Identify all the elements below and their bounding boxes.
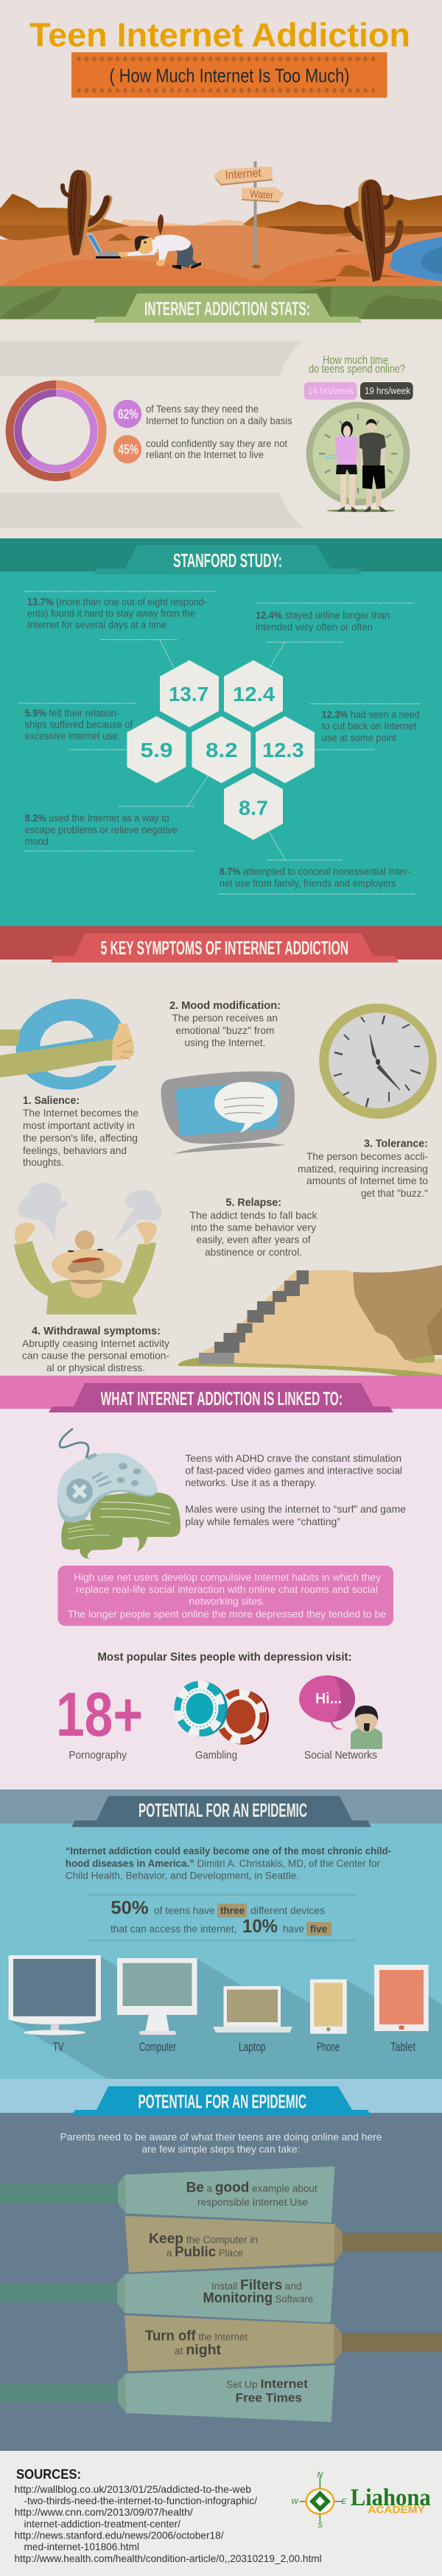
stat: devices: 50% bbox=[110, 1898, 149, 1918]
fists bbox=[15, 1222, 35, 1245]
intro: parents: Parents need to be aware of what their teens are doing online and here bbox=[60, 2131, 382, 2143]
arms and torso bbox=[14, 1241, 156, 1315]
symptom 3: tolerance: 3. Tolerance: bbox=[364, 1139, 428, 1150]
stat: 62%: 62% bbox=[118, 407, 138, 421]
sources heading: SOURCES: bbox=[16, 2467, 81, 2482]
feather wisp bbox=[158, 214, 164, 235]
sign: Water bbox=[242, 187, 284, 203]
text: adhd: of fast-paced video games and interactive social bbox=[185, 1465, 402, 1477]
symptom 5: relapse: 5. Relapse: bbox=[225, 1197, 281, 1209]
sources bbox=[15, 2467, 322, 2564]
quote bbox=[66, 1845, 391, 1882]
step sign 1: be a good example: Be a good example about bbox=[186, 2181, 318, 2196]
symptom 5: relapse: into the same behavior very bbox=[191, 1222, 316, 1234]
callout box: high use: networking sites. bbox=[189, 1595, 265, 1607]
speech bubble bbox=[299, 1675, 355, 1730]
steam bbox=[18, 1183, 68, 1242]
text: adhd bbox=[185, 1452, 402, 1488]
symptom 2: mood modification: 2. Mood modification: bbox=[169, 1000, 281, 1012]
text: males and females: Males were using the internet to “surf” and game bbox=[185, 1503, 406, 1515]
ground shadow bbox=[327, 510, 395, 512]
step sign 4: turn off: Turn off the Internet bbox=[145, 2329, 248, 2344]
hexagon 12.3: 12.3 bbox=[262, 739, 304, 761]
callout: 12.4: 12.4% stayed online longer than bbox=[256, 610, 390, 621]
stat: 62%: of Teens say they need the bbox=[146, 404, 259, 415]
step sign 5: set up internet free times: Free Times bbox=[236, 2391, 302, 2405]
logo: liahona academy bbox=[291, 2471, 431, 2530]
heading: INTERNET ADDICTION STATS: bbox=[144, 298, 310, 320]
sign: Internet: Internet bbox=[225, 167, 262, 182]
girl bbox=[335, 421, 359, 512]
stat: 62%: Internet to function on a daily basis bbox=[146, 415, 292, 426]
question: how much time bbox=[309, 354, 405, 376]
symptom 5: relapse bbox=[190, 1197, 318, 1258]
callout: 12.3: use at some point bbox=[322, 732, 396, 743]
icon: 18+ pornography: 18+ bbox=[56, 1680, 143, 1749]
hexagon 12.3 bbox=[256, 716, 315, 784]
hexagon 12.4: 12.4 bbox=[233, 683, 275, 705]
desert ground bbox=[0, 225, 442, 287]
symptom 4: withdrawal symptoms: Abruptly ceasing Internet activity bbox=[22, 1337, 169, 1349]
mountains right bbox=[242, 194, 442, 237]
hexagon 8.2 bbox=[192, 716, 250, 784]
heading ribbon bbox=[49, 1383, 393, 1412]
teal chip bbox=[174, 1681, 228, 1736]
hexagon 5.9 bbox=[127, 716, 186, 784]
callout: 8.7: net use from family, friends and employers bbox=[220, 878, 396, 889]
sources: http://www.cnn.com/2013/09/07/health/ bbox=[15, 2506, 193, 2518]
icon: monitor with speech bubble bbox=[161, 1071, 295, 1154]
cord bbox=[60, 1429, 88, 1458]
label: Laptop bbox=[239, 2040, 265, 2054]
icon: social network person with bubble: Hi... bbox=[315, 1691, 342, 1707]
heading: POTENTIAL FOR AN EPIDEMIC bbox=[138, 1799, 307, 1821]
icon: internet e held by hand bbox=[0, 989, 134, 1099]
highlight: five bbox=[306, 1922, 332, 1936]
callout: 8.7 bbox=[219, 832, 415, 894]
step sign 3: install filters bbox=[0, 2266, 334, 2323]
stat: devices: different devices bbox=[250, 1905, 325, 1916]
symptom 5: relapse: The addict tends to fall back bbox=[190, 1209, 318, 1221]
subtitle text: ( How Much Internet Is Too Much) bbox=[109, 65, 349, 87]
step sign 4: turn off bbox=[124, 2315, 442, 2371]
question: how much time: do teens spend online? bbox=[309, 363, 405, 376]
large bubble bbox=[91, 1492, 180, 1552]
hill bbox=[199, 1270, 442, 1375]
hexagon 13.7: 13.7 bbox=[169, 683, 208, 705]
icon: game controller and speech bubbles bbox=[57, 1429, 180, 1559]
stat: devices: of teens have bbox=[154, 1905, 215, 1916]
symptom 2: mood modification: The person receives an bbox=[172, 1012, 278, 1024]
step sign 4: turn off: at night bbox=[175, 2343, 222, 2358]
stat: 62% bbox=[113, 400, 292, 428]
label: Phone bbox=[317, 2040, 340, 2054]
cliff face bbox=[353, 1265, 442, 1360]
callout: 8.2: mood bbox=[25, 836, 49, 847]
mouth bbox=[68, 1258, 105, 1273]
stairs bbox=[199, 1270, 309, 1364]
symptom 3: tolerance: matized, requiring increasing bbox=[298, 1163, 428, 1175]
symptom 1: salience: The Internet becomes the bbox=[23, 1107, 138, 1119]
step sign 1: be a good example bbox=[0, 2167, 335, 2223]
stat: 45% bbox=[113, 435, 287, 463]
label: TV bbox=[53, 2040, 64, 2054]
intro: parents: are few simple steps they can take: bbox=[141, 2143, 301, 2155]
callout: 13.7 bbox=[24, 591, 215, 668]
quote: hood diseases in America.” Dimitri A. Christakis, MD, of the Center for bbox=[66, 1858, 380, 1869]
symptom 4: withdrawal symptoms: 4. Withdrawal symptoms: bbox=[32, 1326, 161, 1337]
sign: Water: Water bbox=[250, 188, 274, 201]
label: Social Networks bbox=[304, 1749, 377, 1762]
heading ribbon bbox=[94, 545, 362, 574]
sign: Internet bbox=[214, 166, 273, 186]
callout: 5.9: 5.9% felt their relation- bbox=[25, 708, 119, 719]
e opening bbox=[44, 1046, 133, 1077]
callout: 5.9: ships suffered because of bbox=[25, 719, 133, 731]
sources: http://wallblog.co.uk/2013/01/25/addicted-to-the-web bbox=[15, 2483, 251, 2495]
grass bbox=[178, 1357, 442, 1376]
text: males and females: play while females were “chatting” bbox=[185, 1516, 340, 1527]
device: laptop bbox=[213, 1986, 292, 2054]
icon: angry person bbox=[14, 1183, 162, 1315]
logo academy: ACADEMY bbox=[368, 2504, 425, 2516]
mountain shadow right bbox=[265, 226, 442, 236]
section band: internet addiction stats bbox=[0, 286, 442, 323]
symptom 5: relapse: easily, even after years of bbox=[196, 1234, 311, 1245]
symptom 1: salience bbox=[23, 1095, 138, 1168]
e counter bbox=[40, 1021, 94, 1046]
desert scene illustration bbox=[0, 161, 442, 287]
hexagon 8.7 bbox=[224, 773, 283, 840]
pill: 19 hrs/week: 19 hrs/week bbox=[365, 385, 410, 396]
heading ribbon bbox=[71, 2086, 371, 2116]
icon: poker chips gambling bbox=[174, 1681, 269, 1762]
label: Tablet bbox=[390, 2040, 415, 2054]
sources: http://www.health.com/health/condition-article/0,,20310219_2,00.html bbox=[15, 2552, 322, 2564]
stat: 45%: 45% bbox=[118, 442, 138, 457]
title: Teen Internet Addiction bbox=[29, 16, 410, 54]
donut chart bbox=[10, 384, 102, 477]
callout box: high use: High use net users develop compulsive Internet habits in which they bbox=[74, 1572, 381, 1583]
clock hands bbox=[370, 1035, 400, 1090]
symptom 1: salience: feelings, behaviors and bbox=[23, 1144, 127, 1156]
symptom 3: tolerance: amounts of Internet time to bbox=[306, 1175, 428, 1186]
sources: med-internet-101806.html bbox=[24, 2541, 139, 2552]
stat: 45%: could confidently say they are not bbox=[146, 438, 287, 449]
callout: 12.3 bbox=[310, 704, 421, 750]
label: Computer bbox=[139, 2040, 176, 2054]
hexagon 12.4 bbox=[224, 660, 283, 728]
callout: 8.2: escape problems or relieve negative bbox=[25, 824, 178, 835]
callout: 12.3: 12.3% had seen a need bbox=[322, 709, 420, 720]
sources: internet-addiction-treatment-center/ bbox=[24, 2518, 180, 2530]
pill: 19 hrs/week bbox=[360, 382, 413, 400]
hand bbox=[112, 1024, 134, 1060]
head bun bbox=[75, 1231, 94, 1250]
ground sweep right bbox=[250, 254, 442, 287]
stat: devices: five bbox=[310, 1924, 327, 1935]
section: stanford study background bbox=[0, 538, 442, 926]
callout: 12.4: intended very often or often bbox=[256, 622, 373, 633]
symptom 1: salience: thoughts. bbox=[23, 1156, 64, 1168]
arm bbox=[0, 1030, 107, 1077]
stat: devices: 10% bbox=[242, 1916, 278, 1937]
clock hand bbox=[326, 454, 337, 459]
band ornaments bbox=[0, 286, 442, 319]
callout box: high use: replace real-life social interaction with online chat rooms and social bbox=[76, 1583, 378, 1595]
heading ribbon bbox=[94, 293, 362, 323]
device: computer bbox=[117, 1958, 197, 2054]
quote: Child Health, Behavior, and Development, in Seattle. bbox=[66, 1871, 299, 1882]
stat: devices: have bbox=[283, 1924, 304, 1935]
device: tv bbox=[9, 1955, 101, 2054]
heading ribbon bbox=[71, 1796, 371, 1827]
lake bbox=[390, 237, 442, 281]
icon: wall clock bbox=[303, 987, 442, 1136]
intro: parents bbox=[60, 2131, 382, 2155]
symptom 1: salience: the person's life, affecting bbox=[23, 1132, 138, 1144]
red chip bbox=[215, 1689, 269, 1745]
pill: 14 hrs/week bbox=[304, 382, 357, 400]
step sign 5: set up internet free times bbox=[0, 2365, 335, 2422]
callout: 12.3: to cut back on Internet bbox=[322, 721, 416, 732]
hexagon 5.9: 5.9 bbox=[140, 739, 172, 761]
heading ribbon bbox=[51, 933, 399, 963]
subtitle banner bbox=[71, 52, 387, 98]
controller bbox=[57, 1453, 157, 1523]
step sign 2: keep the computer: Keep the Computer in bbox=[149, 2231, 258, 2247]
sand mounds bbox=[108, 234, 134, 241]
text: males and females bbox=[185, 1503, 406, 1527]
neck bbox=[69, 1278, 103, 1298]
callout: 13.7: Internet for several days at a time bbox=[27, 619, 166, 630]
face bbox=[52, 1249, 122, 1281]
callout: 8.2 bbox=[24, 776, 208, 851]
section band: what internet addiction is linked to bbox=[0, 1376, 442, 1412]
subheading: most popular sites: Most popular Sites people with depression visit: bbox=[97, 1651, 352, 1664]
mountains left bbox=[0, 194, 130, 241]
symptom 1: salience: most important activity in bbox=[23, 1119, 135, 1131]
text: adhd: networks. Use it as a therapy. bbox=[185, 1477, 317, 1488]
label: Gambling bbox=[195, 1749, 237, 1762]
hexagon 13.7 bbox=[160, 660, 219, 728]
callout: 5.9 bbox=[19, 703, 136, 750]
stat: devices: three bbox=[220, 1905, 245, 1916]
section: potential for an epidemic, devices bbox=[0, 1790, 442, 2079]
heading: POTENTIAL FOR AN EPIDEMIC bbox=[138, 2091, 306, 2113]
device: tablet bbox=[374, 1965, 429, 2054]
stat: 45%: reliant on the Internet to live bbox=[146, 449, 264, 460]
callout: 12.4 bbox=[256, 603, 413, 668]
symptom 4: withdrawal symptoms bbox=[22, 1326, 169, 1373]
icon: social network person with bubble bbox=[299, 1675, 382, 1762]
symptom 2: mood modification: emotional "buzz" from bbox=[175, 1024, 274, 1036]
compass: W bbox=[291, 2498, 299, 2506]
step sign 3: install filters: Install Filters and bbox=[211, 2278, 302, 2293]
pill: 14 hrs/week: 14 hrs/week bbox=[308, 385, 354, 396]
step sign 2: keep the computer: a Public Place bbox=[166, 2245, 243, 2260]
compass: N bbox=[317, 2471, 323, 2480]
symptom 2: mood modification: using the Internet. bbox=[184, 1037, 265, 1049]
gray bars bbox=[0, 341, 304, 528]
far hills bbox=[118, 219, 245, 228]
cactus right bbox=[348, 180, 400, 282]
compass: S bbox=[318, 2522, 323, 2530]
clock with teens bbox=[306, 402, 410, 512]
compass: E bbox=[342, 2498, 347, 2506]
step sign 5: set up internet free times: Set Up Internet bbox=[226, 2377, 308, 2391]
text: adhd: Teens with ADHD crave the constant stimulation bbox=[185, 1452, 401, 1464]
quote: “Internet addiction could easily become one of the most chronic child- bbox=[66, 1845, 391, 1857]
hexagon 8.2: 8.2 bbox=[206, 739, 238, 761]
callout: 13.7: 13.7% (more than one out of eight respond- bbox=[27, 597, 207, 608]
heading: STANFORD STUDY: bbox=[173, 549, 282, 571]
callout box: high use bbox=[57, 1566, 393, 1626]
callout: 5.9: excessive Internet use. bbox=[25, 731, 120, 742]
laptop bbox=[86, 233, 122, 258]
section: potential for an epidemic, steps bbox=[0, 2079, 442, 2451]
sources: http://news.stanford.edu/news/2006/october18/ bbox=[15, 2530, 224, 2541]
signpost bbox=[214, 161, 284, 268]
symptom 3: tolerance bbox=[298, 1139, 428, 1199]
stat: devices bbox=[88, 1895, 357, 1940]
mountain shadow left bbox=[0, 225, 130, 241]
symptom 2: mood modification bbox=[169, 1000, 281, 1049]
callout: 8.2: 8.2% used the Internet as a way to bbox=[25, 813, 169, 824]
step sign 1: be a good example: responsible Internet Use bbox=[197, 2197, 308, 2208]
hexagon 8.7: 8.7 bbox=[239, 796, 268, 819]
boy bbox=[359, 419, 387, 512]
sources: -two-thirds-need-the-internet-to-function-infographic/ bbox=[24, 2495, 257, 2507]
logo wordmark: Liahona bbox=[351, 2485, 431, 2511]
callout: 8.7: 8.7% attempted to conceal nonessential Inter- bbox=[220, 866, 410, 877]
illustration: relapse staircase and hill bbox=[178, 1265, 442, 1376]
callout: 13.7: ents) found it hard to stay away from the bbox=[27, 608, 195, 619]
label: Pornography bbox=[69, 1749, 127, 1762]
controller port bbox=[85, 1453, 97, 1460]
symptom 1: salience: 1. Salience: bbox=[23, 1095, 80, 1107]
compass bbox=[291, 2471, 347, 2530]
highlight: three bbox=[217, 1904, 247, 1918]
cactus left bbox=[63, 170, 108, 256]
person bbox=[351, 1706, 382, 1749]
monitor stand bbox=[172, 1143, 286, 1154]
section band: 5 key symptoms bbox=[0, 926, 442, 963]
stat: devices: that can access the internet, bbox=[110, 1924, 237, 1935]
step sign 3: install filters: Monitoring Software bbox=[203, 2291, 313, 2306]
device shadows bbox=[11, 1957, 442, 2079]
device: phone bbox=[310, 1979, 347, 2054]
symptom 4: withdrawal symptoms: can cause the personal emotion- bbox=[22, 1350, 169, 1362]
symptom 3: tolerance: get that "buzz." bbox=[361, 1187, 428, 1199]
symptom 4: withdrawal symptoms: al or physical distress. bbox=[46, 1362, 145, 1373]
speech bubble bbox=[214, 1082, 278, 1133]
callout box: high use: The longer people spent online the more depressed they tended to be bbox=[68, 1608, 386, 1620]
symptom 3: tolerance: The person becomes accli- bbox=[306, 1150, 428, 1162]
symptom 5: relapse: abstinence or control. bbox=[205, 1246, 302, 1258]
small bubble bbox=[61, 1517, 122, 1559]
step sign 2: keep the computer bbox=[125, 2216, 442, 2273]
ground sweep left bbox=[0, 259, 271, 287]
addicted man bbox=[118, 235, 201, 270]
question: how much time: How much time bbox=[323, 354, 388, 367]
